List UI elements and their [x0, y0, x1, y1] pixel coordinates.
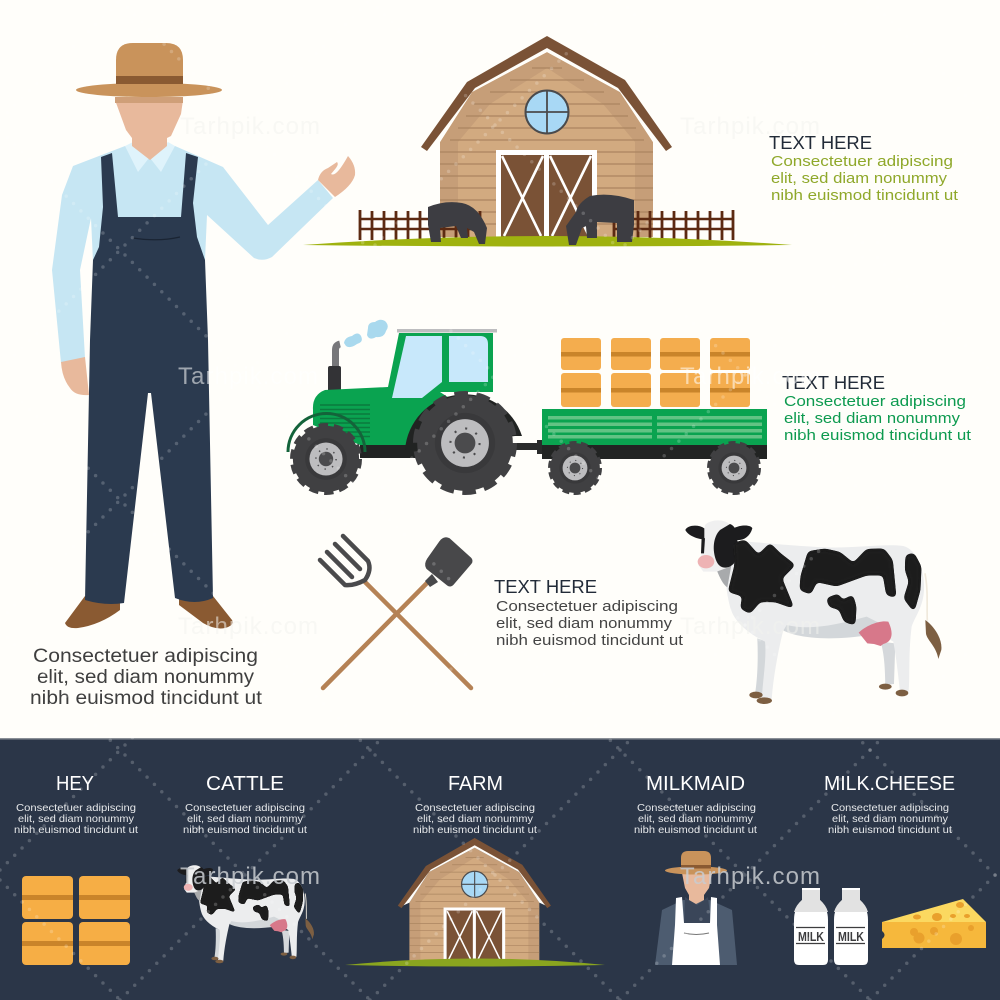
tool handles — [323, 582, 471, 688]
milk bottles icon: MILK — [798, 929, 824, 944]
farm title: FARM — [448, 773, 503, 795]
trailer bed — [542, 409, 767, 459]
column: hey — [14, 773, 138, 965]
cattle description — [183, 802, 307, 836]
watermarks — [178, 113, 820, 890]
ground — [303, 236, 792, 246]
farmer caption: Consectetuer adipiscing — [33, 646, 258, 667]
rear tractor wheel — [416, 394, 514, 492]
farmer hat — [76, 43, 222, 103]
cab windows — [392, 336, 488, 398]
cab roof — [397, 329, 497, 332]
tools text block — [494, 577, 684, 649]
farmer overalls — [85, 153, 213, 604]
watermarks: Tarhpik.com — [180, 113, 320, 140]
milk cheese description — [828, 802, 952, 836]
column: farm — [345, 773, 605, 966]
crossed farm tools — [320, 536, 471, 688]
column: cattle — [177, 773, 314, 963]
tools description — [496, 598, 684, 649]
hay bales icon — [22, 876, 130, 965]
barn description — [771, 153, 959, 204]
shovel head — [425, 542, 468, 587]
farmer shoes — [65, 596, 233, 628]
hey description: elit, sed diam nonummy — [18, 813, 135, 825]
milk bottles icon: MILK — [838, 929, 864, 944]
hay bales on trailer — [561, 338, 750, 407]
exhaust pipe — [328, 344, 341, 392]
farmer left hand — [61, 357, 89, 395]
left fence — [359, 210, 480, 240]
milkmaid figure — [655, 851, 737, 965]
tools heading: TEXT HERE — [494, 577, 597, 597]
farmer caption — [30, 646, 263, 709]
farmer collar — [125, 142, 175, 172]
barn description: Consectetuer adipiscing — [771, 153, 953, 170]
cheese wedge icon — [882, 899, 986, 948]
milk cheese description: Consectetuer adipiscing — [831, 802, 949, 814]
tractor text block — [782, 373, 972, 444]
left black cow — [428, 202, 487, 244]
tools description: Consectetuer adipiscing — [496, 598, 678, 615]
column: milk cheese — [794, 773, 986, 965]
watermarks: Tarhpik.com — [180, 863, 320, 890]
farmer head and neck — [115, 100, 183, 160]
watermarks: Tarhpik.com — [680, 363, 820, 390]
cab and hood — [313, 333, 493, 445]
dairy cow — [685, 520, 941, 704]
barn description: nibh euismod tincidunt ut — [771, 187, 959, 204]
tractor description: Consectetuer adipiscing — [784, 393, 966, 410]
watermarks: Tarhpik.com — [178, 613, 318, 640]
column: milkmaid — [634, 773, 757, 965]
milkmaid title: MILKMAID — [646, 773, 745, 795]
hey description: Consectetuer adipiscing — [16, 802, 136, 814]
front trailer wheel — [550, 443, 600, 493]
hey description — [14, 802, 138, 836]
chassis — [360, 445, 420, 458]
farmer right hand — [318, 156, 355, 197]
tractor description: nibh euismod tincidunt ut — [784, 427, 972, 444]
rear trailer wheel — [709, 443, 759, 493]
watermarks: Tarhpik.com — [178, 363, 318, 390]
milk cheese title: MILK.CHEESE — [824, 773, 955, 795]
milkmaid description — [634, 802, 757, 836]
barn text block — [769, 133, 959, 204]
milk bottles icon — [794, 888, 868, 965]
right fence — [613, 210, 733, 240]
right black cow — [566, 195, 634, 245]
hey title: HEY — [56, 773, 94, 795]
farmer caption: nibh euismod tincidunt ut — [30, 688, 263, 709]
tractor heading: TEXT HERE — [782, 373, 885, 393]
farmer caption: elit, sed diam nonummy — [37, 667, 255, 688]
milkmaid description: elit, sed diam nonummy — [638, 813, 754, 825]
cattle description: nibh euismod tincidunt ut — [183, 824, 307, 836]
milk cheese description: nibh euismod tincidunt ut — [828, 824, 952, 836]
cattle description: Consectetuer adipiscing — [185, 802, 305, 814]
watermarks: Tarhpik.com — [680, 863, 820, 890]
tools description: elit, sed diam nonummy — [496, 615, 673, 632]
tow bar — [515, 440, 542, 454]
barn — [421, 36, 672, 237]
front fender — [288, 414, 365, 452]
cattle title: CATTLE — [206, 773, 284, 795]
milkmaid description: Consectetuer adipiscing — [637, 802, 756, 814]
milkmaid description: nibh euismod tincidunt ut — [634, 824, 757, 836]
tractor description — [784, 393, 972, 444]
hey description: nibh euismod tincidunt ut — [14, 824, 138, 836]
tractor description: elit, sed diam nonummy — [784, 410, 961, 427]
farmer pocket — [133, 237, 180, 240]
barn description: elit, sed diam nonummy — [771, 170, 948, 187]
front tractor wheel — [292, 425, 360, 493]
farm description: nibh euismod tincidunt ut — [413, 824, 537, 836]
tools description: nibh euismod tincidunt ut — [496, 632, 684, 649]
farmer figure — [52, 43, 355, 628]
farm description: Consectetuer adipiscing — [415, 802, 535, 814]
barn scene — [303, 36, 792, 246]
cow icon — [177, 865, 314, 963]
farm description: elit, sed diam nonummy — [417, 813, 534, 825]
panel: bottom band — [0, 738, 1000, 1000]
smoke puffs — [344, 320, 388, 347]
tractor with trailer — [288, 320, 767, 493]
farm description — [413, 802, 537, 836]
rear fender — [405, 394, 522, 450]
pitchfork head — [320, 536, 369, 585]
milk cheese description: elit, sed diam nonummy — [832, 813, 949, 825]
watermarks: Tarhpik.com — [680, 113, 820, 140]
farmer shirt — [52, 146, 333, 363]
cattle description: elit, sed diam nonummy — [187, 813, 304, 825]
barn heading: TEXT HERE — [769, 133, 872, 153]
barn icon — [345, 838, 605, 966]
watermarks: Tarhpik.com — [680, 613, 820, 640]
engine grille — [320, 405, 370, 436]
